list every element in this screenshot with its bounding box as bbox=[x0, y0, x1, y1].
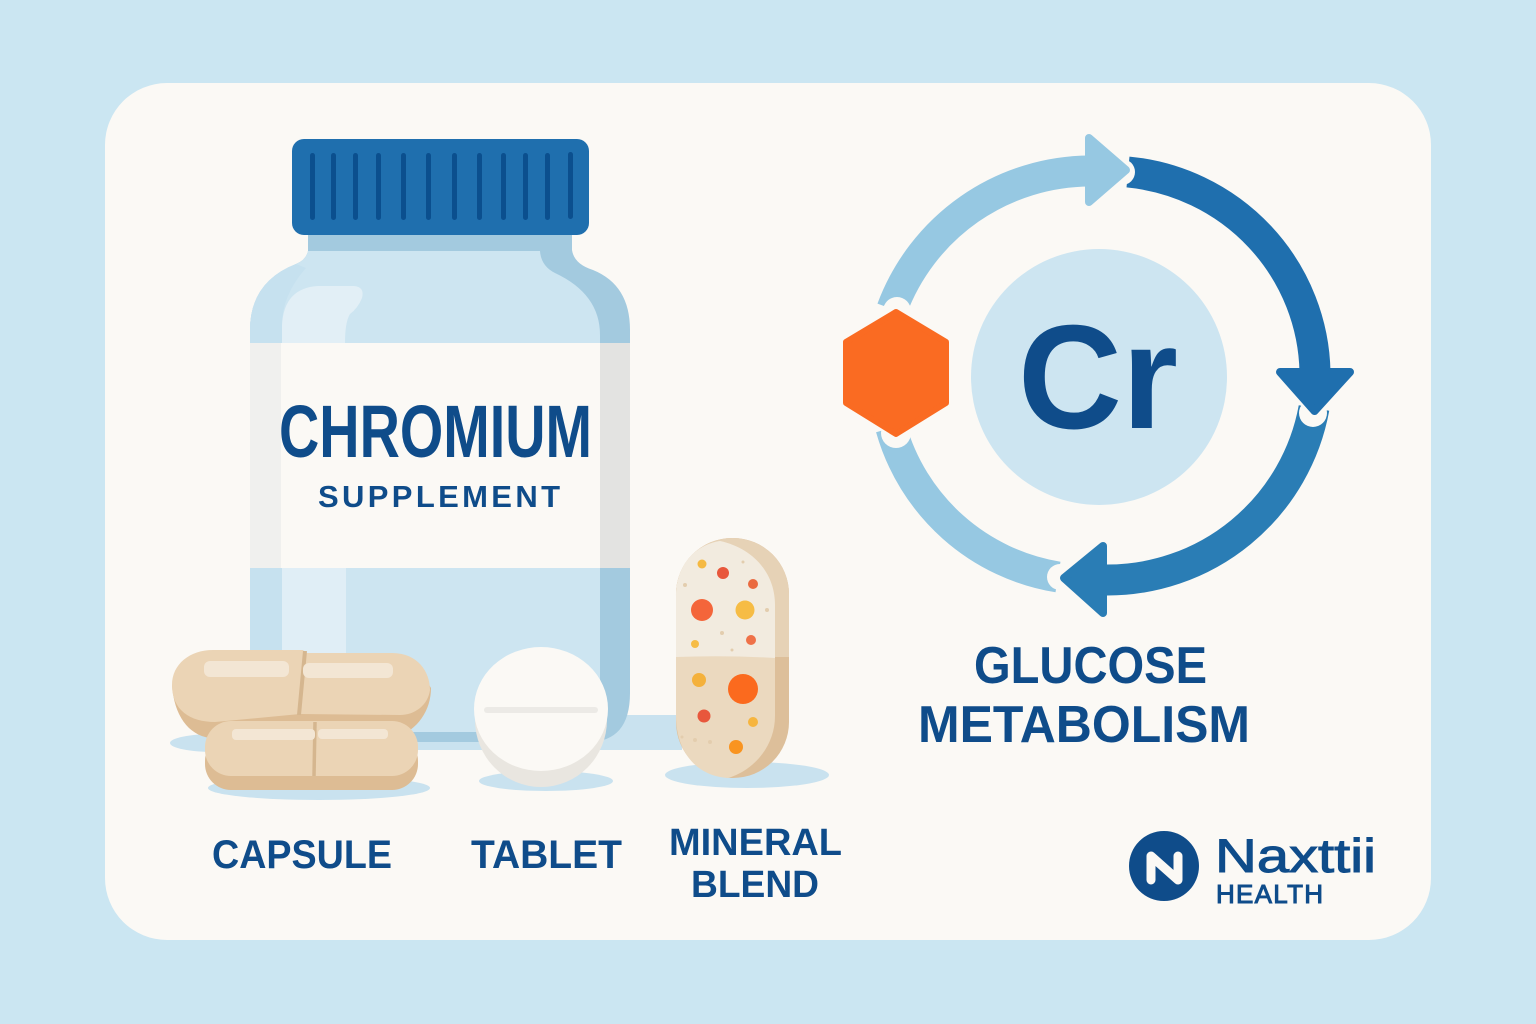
logo: Naxttii Health bbox=[1129, 829, 1376, 909]
upper capsule bbox=[172, 670, 431, 738]
bottle glass body bbox=[250, 235, 630, 742]
glass highlight bbox=[282, 286, 363, 343]
diagram: glucose metabolism cycle bbox=[846, 138, 1350, 613]
label: mineral blend: MINERAL bbox=[669, 822, 842, 864]
lower capsule bbox=[205, 735, 418, 790]
icon: orange hexagon bbox=[846, 312, 946, 434]
illustration: tablet bbox=[474, 647, 613, 791]
label: mineral blend bbox=[669, 822, 842, 906]
chromium circle bbox=[971, 249, 1227, 505]
illustration: supplement bottle bbox=[250, 139, 682, 750]
label: tablet: TABLET bbox=[471, 833, 622, 877]
bottle cap bbox=[292, 139, 589, 235]
label: supplement: SUPPLEMENT bbox=[318, 479, 560, 514]
panel: main card bbox=[105, 83, 1431, 940]
heading: glucose metabolism bbox=[918, 637, 1250, 754]
heading: glucose metabolism: GLUCOSE bbox=[974, 637, 1207, 695]
label: capsule: CAPSULE bbox=[212, 833, 392, 877]
text: Cr symbol: Cr bbox=[1018, 295, 1178, 460]
arc tail notches bbox=[881, 159, 1327, 590]
illustration: mineral blend pill bbox=[665, 538, 829, 788]
cycle arc shafts bbox=[891, 171, 1315, 580]
bottle floor shadow bbox=[400, 715, 682, 750]
icon: N badge bbox=[1129, 831, 1199, 901]
brand name: Naxttii bbox=[1215, 829, 1376, 882]
heading: glucose metabolism: METABOLISM bbox=[918, 696, 1250, 754]
arrowheads bbox=[1064, 138, 1350, 613]
mineral dots bbox=[680, 560, 769, 754]
brand subtitle: HEALTH bbox=[1216, 879, 1323, 909]
illustration: capsules bbox=[170, 650, 431, 800]
label: mineral blend: BLEND bbox=[691, 864, 819, 906]
bottle label bbox=[250, 343, 630, 568]
label: chromium: CHROMIUM bbox=[279, 390, 592, 473]
